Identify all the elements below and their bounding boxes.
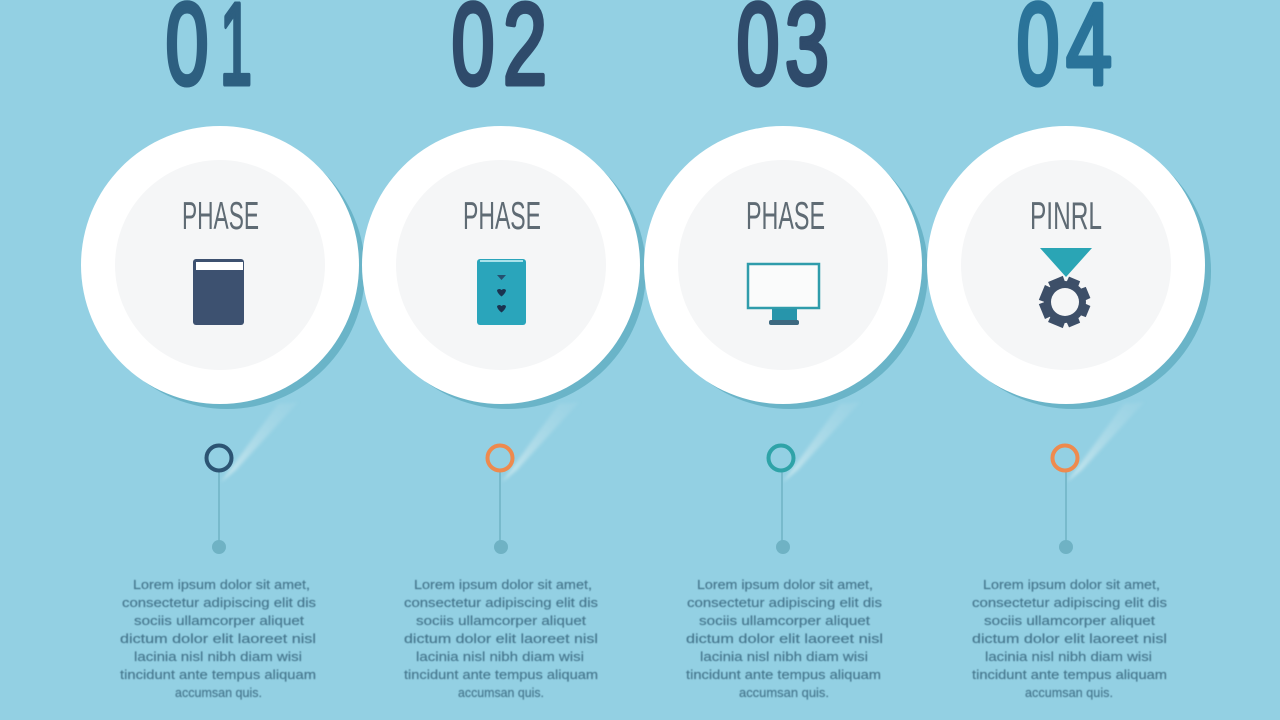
marker 2: ring, line and dot xyxy=(488,446,512,554)
text block 1: sociis ullamcorper aliquet xyxy=(134,613,304,628)
circle shadow 3 xyxy=(652,133,928,409)
text block 3: lacinia nisl nibh diam wisi xyxy=(700,649,868,664)
text block 2: tincidunt ante tempus aliquam xyxy=(404,667,598,682)
text block 2: accumsan quis. xyxy=(458,685,544,700)
text block 2 xyxy=(404,577,599,700)
connector beam 4 xyxy=(1067,402,1144,482)
text block 3: sociis ullamcorper aliquet xyxy=(699,613,870,628)
text block 4: accumsan quis. xyxy=(1025,685,1113,700)
text block 3: Lorem ipsum dolor sit amet, xyxy=(697,577,873,592)
icon: teal book with hearts xyxy=(477,259,526,325)
text block 4: dictum dolor elit laoreet nisl xyxy=(972,631,1167,646)
phase 1 label: PHASE xyxy=(182,195,259,238)
phase 3 label: PHASE xyxy=(746,195,825,238)
text block 1: accumsan quis. xyxy=(175,685,262,700)
phase 4 label: PINRL xyxy=(1030,195,1102,238)
text block 2: dictum dolor elit laoreet nisl xyxy=(404,631,598,646)
text block 1: Lorem ipsum dolor sit amet, xyxy=(133,577,310,592)
connector beam 3 xyxy=(783,402,860,482)
text block 3: consectetur adipiscing elit dis xyxy=(687,595,883,610)
text block 4: Lorem ipsum dolor sit amet, xyxy=(983,577,1160,592)
text block 2: consectetur adipiscing elit dis xyxy=(404,595,599,610)
text block 1: consectetur adipiscing elit dis xyxy=(122,595,317,610)
text block 2: lacinia nisl nibh diam wisi xyxy=(416,649,584,664)
connector beam 2 xyxy=(502,402,579,482)
marker 4: ring, line and dot xyxy=(1052,446,1078,554)
text block 3: tincidunt ante tempus aliquam xyxy=(686,667,881,682)
text block 3 xyxy=(686,577,883,700)
text block 2: Lorem ipsum dolor sit amet, xyxy=(414,577,592,592)
icon: navy book xyxy=(193,259,244,325)
text block 4: consectetur adipiscing elit dis xyxy=(972,595,1168,610)
circle shadow 2 xyxy=(370,133,646,409)
circle 1 xyxy=(81,126,359,404)
text block 1 xyxy=(120,577,317,700)
circle shadow 1 xyxy=(89,133,365,409)
circle 2 xyxy=(362,126,640,404)
text block 4: tincidunt ante tempus aliquam xyxy=(972,667,1167,682)
text block 1: tincidunt ante tempus aliquam xyxy=(120,667,316,682)
text block 2: sociis ullamcorper aliquet xyxy=(416,613,586,628)
phase 4 number xyxy=(1016,0,1112,109)
text block 4 xyxy=(972,577,1168,700)
text block 1: dictum dolor elit laoreet nisl xyxy=(120,631,316,646)
text block 3: accumsan quis. xyxy=(739,685,829,700)
connector beam 1 xyxy=(221,402,298,482)
circle shadow 4 xyxy=(935,133,1211,409)
marker 1: ring, line and dot xyxy=(206,446,232,554)
marker 3: ring, line and dot xyxy=(768,446,794,554)
text block 3: dictum dolor elit laoreet nisl xyxy=(686,631,883,646)
phase 3 number xyxy=(736,0,829,109)
icon: medal with gear xyxy=(1032,248,1098,335)
icon: monitor xyxy=(748,264,819,325)
circle 4 xyxy=(927,126,1205,404)
phase 2 number xyxy=(452,0,547,109)
circle 3 xyxy=(644,126,922,404)
text block 4: sociis ullamcorper aliquet xyxy=(984,613,1155,628)
text block 4: lacinia nisl nibh diam wisi xyxy=(985,649,1152,664)
text block 1: lacinia nisl nibh diam wisi xyxy=(134,649,302,664)
phase 2 label: PHASE xyxy=(463,195,541,238)
